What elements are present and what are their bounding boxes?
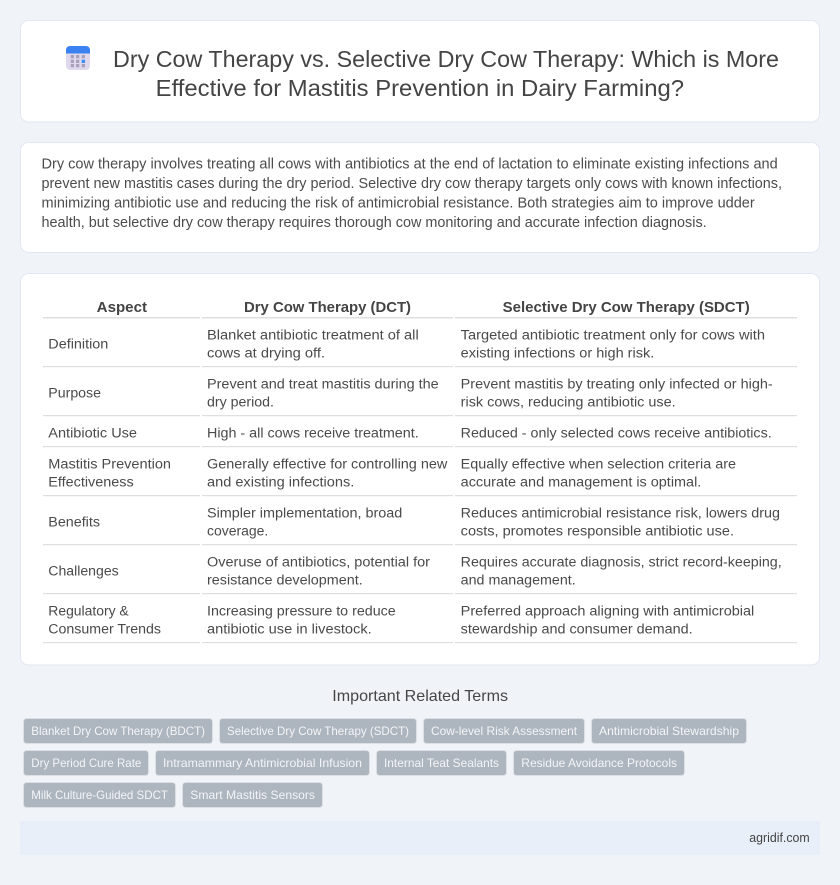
tag: Internal Teat Sealants [384, 756, 499, 770]
row: definition: Definition [48, 336, 108, 352]
row: antibiotic use: Reduced - only selected cows receive antibiotics. [461, 425, 772, 441]
row: purpose: risk cows, reducing antibiotic use. [461, 394, 676, 410]
row: purpose [48, 376, 773, 410]
panel: related term tags [24, 718, 746, 808]
row: antibiotic use: High - all cows receive treatment. [207, 425, 419, 441]
tag [220, 718, 416, 744]
tag [592, 718, 746, 744]
footer [20, 821, 820, 855]
tag [514, 750, 684, 776]
icon: calendar [66, 46, 90, 70]
tag: Cow-level Risk Assessment [431, 724, 578, 738]
row: benefits: coverage. [207, 523, 268, 539]
tag [156, 750, 370, 776]
row: regulatory and consumer trends: Increasing pressure to reduce [207, 603, 396, 619]
text block: description: prevent new mastitis cases during the dry period. Selective dry cow therapy targets only cows with known infections, [42, 176, 782, 192]
row: challenges: resistance development. [207, 572, 363, 588]
panel: comparison table card [20, 274, 820, 665]
tag: Residue Avoidance Protocols [521, 756, 677, 770]
text block: description [42, 156, 782, 231]
row: mastitis prevention effectiveness: Equally effective when selection criteria are [461, 456, 736, 472]
row: mastitis prevention effectiveness: Mastitis Prevention [48, 456, 171, 472]
row: challenges: Overuse of antibiotics, potential for [207, 554, 430, 570]
text block: description: Dry cow therapy involves treating all cows with antibiotics at the end of lactation to eliminate existing infections and [42, 156, 778, 172]
title: Dry Cow Therapy vs. Selective Dry Cow Therapy: Which is More [113, 46, 779, 72]
table header: Aspect [97, 300, 147, 316]
panel: title card [20, 20, 820, 122]
row: regulatory and consumer trends: Preferred approach aligning with antimicrobial [461, 603, 754, 619]
row: challenges: Challenges [48, 563, 119, 579]
tag [24, 718, 212, 744]
heading: important related terms: Important Related Terms [332, 688, 508, 705]
row: definition: Targeted antibiotic treatment only for cows with [461, 327, 765, 343]
row: purpose: Purpose [48, 385, 101, 401]
row: purpose: dry period. [207, 394, 274, 410]
tag [24, 782, 176, 808]
row: benefits: Benefits [48, 514, 100, 530]
row: definition: existing infections or high risk. [461, 345, 654, 361]
footer: agridif.com [749, 831, 810, 845]
tag: Milk Culture-Guided SDCT [31, 788, 169, 802]
title: Effective for Mastitis Prevention in Dairy Farming? [156, 75, 684, 101]
tag [182, 782, 322, 808]
tag: Blanket Dry Cow Therapy (BDCT) [31, 724, 205, 738]
row: regulatory and consumer trends: antibiotic use in livestock. [207, 621, 372, 637]
row: antibiotic use: Antibiotic Use [48, 425, 137, 441]
row: definition: Blanket antibiotic treatment of all [207, 327, 419, 343]
row: purpose: Prevent and treat mastitis during the [207, 376, 439, 392]
row: benefits: Reduces antimicrobial resistance risk, lowers drug [461, 505, 780, 521]
title [113, 46, 779, 101]
table header [97, 300, 750, 316]
row: definition [48, 327, 765, 361]
row: mastitis prevention effectiveness: accurate and management is optimal. [461, 474, 701, 490]
row: antibiotic use [48, 425, 772, 441]
panel: description card [20, 142, 820, 252]
row: mastitis prevention effectiveness: Effectiveness [48, 474, 134, 490]
row: regulatory and consumer trends: stewardship and consumer demand. [461, 621, 693, 637]
tag: Smart Mastitis Sensors [190, 788, 315, 802]
row: mastitis prevention effectiveness: Generally effective for controlling new [207, 456, 448, 472]
tag: Dry Period Cure Rate [31, 756, 142, 770]
text block: description: health, but selective dry cow therapy requires thorough cow monitoring and accurate infection diagnosis. [42, 215, 707, 231]
row: regulatory and consumer trends: Regulatory & [48, 603, 129, 619]
tag: Antimicrobial Stewardship [599, 724, 739, 738]
row: challenges [48, 554, 782, 588]
table header: Selective Dry Cow Therapy (SDCT) [503, 300, 750, 316]
row: benefits: costs, promotes responsible antibiotic use. [461, 523, 734, 539]
row: challenges: and management. [461, 572, 576, 588]
row: purpose: Prevent mastitis by treating only infected or high- [461, 376, 773, 392]
row: regulatory and consumer trends [48, 603, 754, 637]
tag [376, 750, 506, 776]
row: benefits [48, 505, 780, 539]
text block: description: minimizing antibiotic use and reducing the risk of antimicrobial resistance. Both strategies aim to improve udder [42, 195, 755, 211]
tag [424, 718, 584, 744]
row: regulatory and consumer trends: Consumer Trends [48, 621, 161, 637]
row: challenges: Requires accurate diagnosis, strict record-keeping, [461, 554, 782, 570]
row: mastitis prevention effectiveness: and existing infections. [207, 474, 354, 490]
row: mastitis prevention effectiveness [48, 456, 736, 490]
row: benefits: Simpler implementation, broad [207, 505, 402, 521]
row: definition: cows at drying off. [207, 345, 325, 361]
tag: Selective Dry Cow Therapy (SDCT) [227, 724, 409, 738]
tag [24, 750, 148, 776]
table header: Dry Cow Therapy (DCT) [244, 300, 411, 316]
tag: Intramammary Antimicrobial Infusion [163, 756, 362, 770]
